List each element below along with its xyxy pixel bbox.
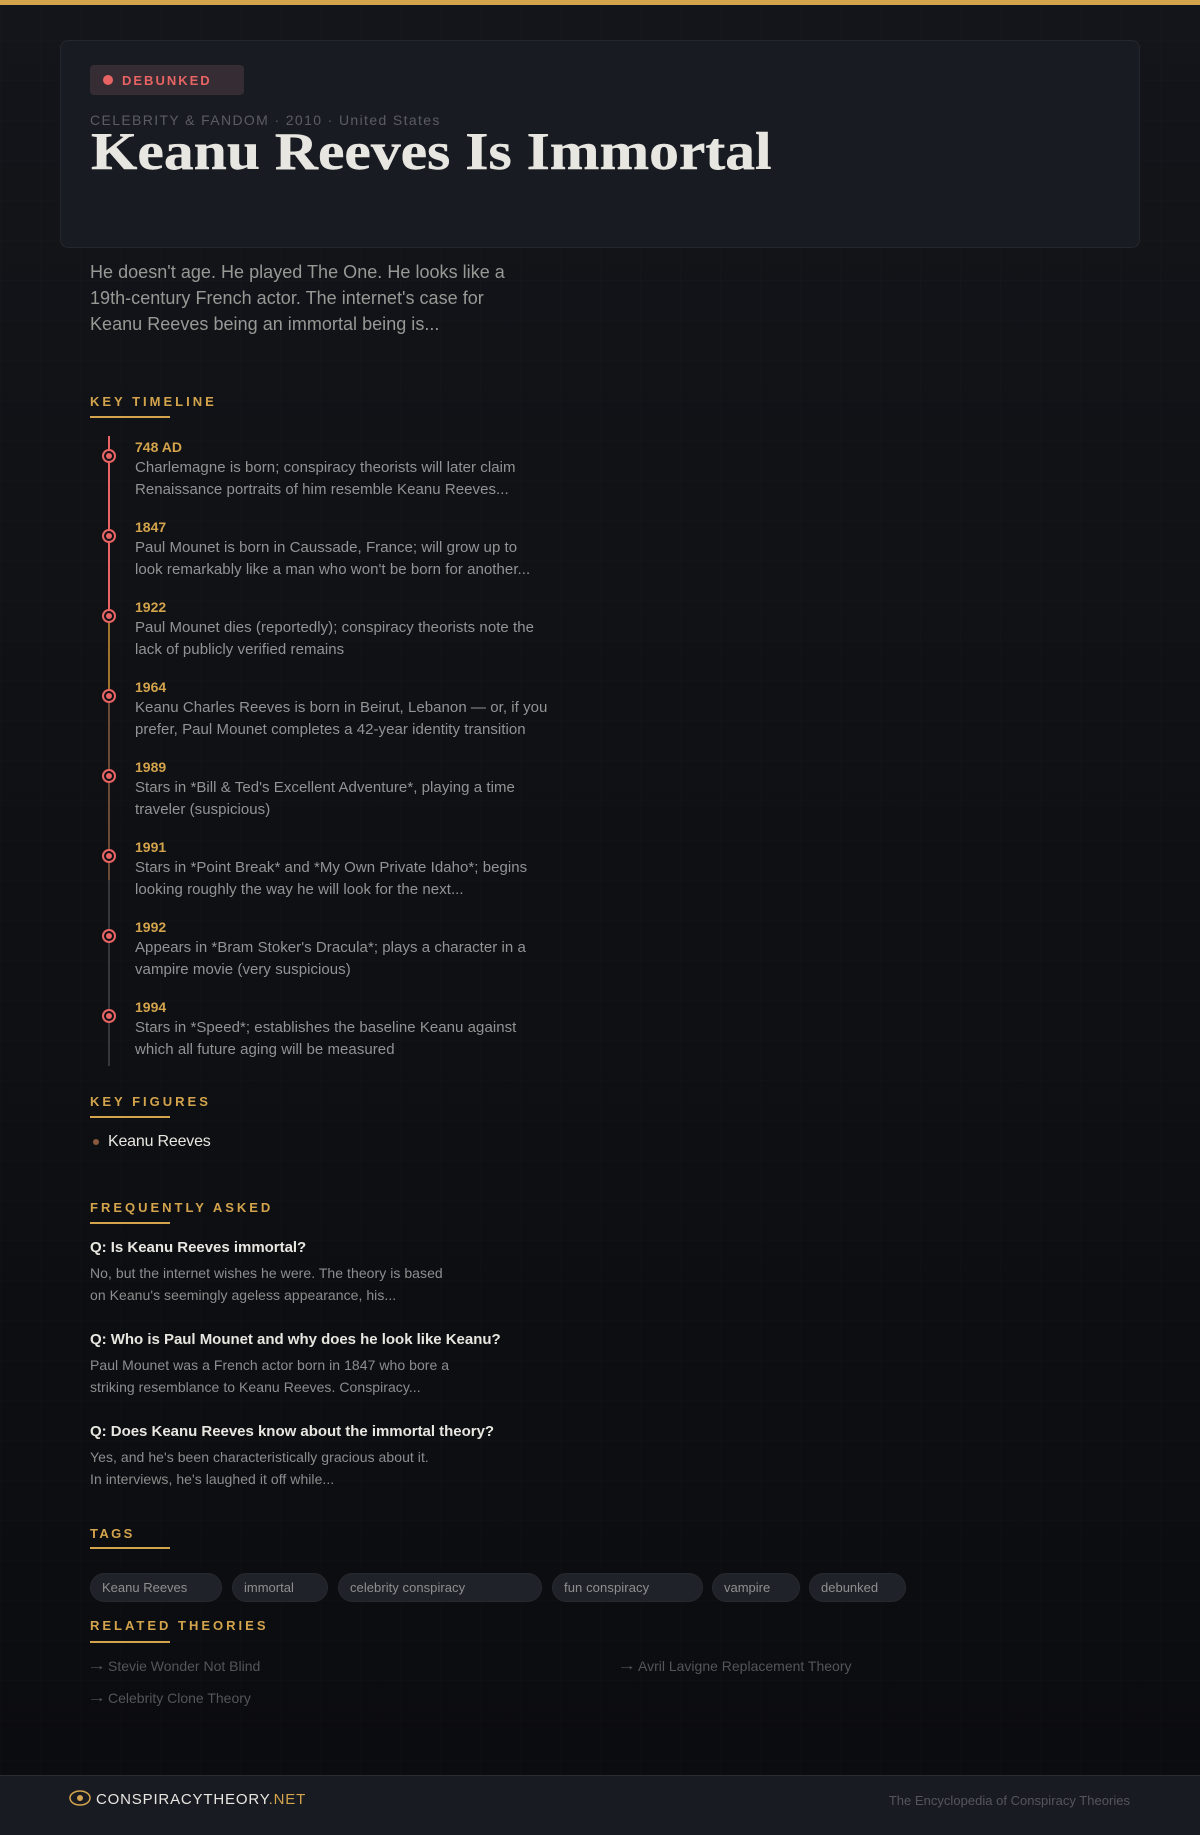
tag: Keanu Reeves bbox=[102, 1580, 187, 1595]
node bbox=[102, 849, 116, 863]
faq item 3: In interviews, he's laughed it off while... bbox=[90, 1471, 334, 1487]
node bbox=[102, 449, 116, 463]
node bbox=[102, 689, 116, 703]
intro text: He doesn't age. He played The One. He looks like a bbox=[90, 262, 505, 282]
badge label: DEBUNKED bbox=[122, 73, 212, 88]
intro text: 19th-century French actor. The internet's case for bbox=[90, 288, 484, 308]
timeline entry: 1994: which all future aging will be measured bbox=[135, 1041, 395, 1058]
timeline entry: 748 AD bbox=[102, 439, 516, 498]
faq item 3: Q: Does Keanu Reeves know about the immortal theory? bbox=[90, 1423, 494, 1440]
faq item 1: on Keanu's seemingly ageless appearance, his... bbox=[90, 1287, 396, 1303]
tag bbox=[90, 1573, 222, 1602]
timeline entry: 1991: looking roughly the way he will look for the next... bbox=[135, 881, 464, 898]
timeline entry: 1994: Stars in *Speed*; establishes the baseline Keanu against bbox=[135, 1019, 516, 1036]
intro text bbox=[90, 262, 505, 334]
status badge bbox=[90, 65, 244, 95]
badge dot bbox=[103, 75, 113, 85]
timeline entry: 1847: look remarkably like a man who won't be born for another... bbox=[135, 561, 530, 578]
tag bbox=[338, 1573, 542, 1602]
timeline entry: 1847 bbox=[102, 519, 530, 578]
tag bbox=[232, 1573, 328, 1602]
timeline line bbox=[108, 436, 110, 1066]
node bbox=[102, 1009, 116, 1023]
timeline entry: 748 AD: Renaissance portraits of him resemble Keanu Reeves... bbox=[135, 481, 509, 498]
faq item 3 bbox=[90, 1423, 494, 1487]
timeline entry: 1922 bbox=[102, 599, 534, 658]
faq item 1 bbox=[90, 1239, 443, 1303]
timeline entry: 1964: prefer, Paul Mounet completes a 42-year identity transition bbox=[135, 721, 526, 738]
footer bbox=[0, 1775, 1200, 1835]
timeline entry: 1991: 1991 bbox=[135, 839, 166, 855]
tag bbox=[809, 1573, 906, 1602]
brand: CONSPIRACYTHEORY.NET bbox=[96, 1791, 306, 1808]
tagline: The Encyclopedia of Conspiracy Theories bbox=[889, 1793, 1130, 1808]
related link: Celebrity Clone: → bbox=[87, 1689, 106, 1705]
related link: Avril Lavigne: Avril Lavigne Replacement Theory bbox=[638, 1658, 852, 1674]
tag bbox=[712, 1573, 800, 1602]
top accent bar bbox=[0, 0, 1200, 5]
heading: related theories: RELATED THEORIES bbox=[90, 1618, 268, 1633]
timeline entry: 1994 bbox=[102, 999, 516, 1058]
node bbox=[102, 769, 116, 783]
intro text: Keanu Reeves being an immortal being is... bbox=[90, 314, 439, 334]
timeline entry: 1964: Keanu Charles Reeves is born in Beirut, Lebanon — or, if you bbox=[135, 699, 547, 716]
tag: immortal bbox=[244, 1580, 294, 1595]
tag bbox=[552, 1573, 703, 1602]
related link: Stevie Wonder: Stevie Wonder Not Blind bbox=[108, 1658, 260, 1674]
tag pills bbox=[90, 1573, 906, 1602]
tag: celebrity conspiracy bbox=[350, 1580, 465, 1595]
timeline entry: 1989: 1989 bbox=[135, 759, 166, 775]
timeline entry: 1992: Appears in *Bram Stoker's Dracula*; plays a character in a bbox=[135, 939, 526, 956]
faq item 2: Paul Mounet was a French actor born in 1847 who bore a bbox=[90, 1357, 449, 1373]
figure: Keanu Reeves: Keanu Reeves bbox=[108, 1133, 211, 1150]
timeline entry: 1964 bbox=[102, 679, 547, 738]
heading: frequently asked: FREQUENTLY ASKED bbox=[90, 1200, 273, 1215]
timeline entry: 748 AD: Charlemagne is born; conspiracy theorists will later claim bbox=[135, 459, 516, 476]
tag: vampire bbox=[724, 1580, 770, 1595]
faq item 1: No, but the internet wishes he were. The theory is based bbox=[90, 1265, 443, 1281]
tag: debunked bbox=[821, 1580, 878, 1595]
timeline entry: 1992: 1992 bbox=[135, 919, 166, 935]
timeline entry: 1922: Paul Mounet dies (reportedly); conspiracy theorists note the bbox=[135, 619, 534, 636]
timeline entry: 1991 bbox=[102, 839, 527, 898]
faq item 2: striking resemblance to Keanu Reeves. Conspiracy... bbox=[90, 1379, 421, 1395]
timeline entry: 1847: 1847 bbox=[135, 519, 166, 535]
timeline entry: 1847: Paul Mounet is born in Caussade, France; will grow up to bbox=[135, 539, 517, 556]
timeline entry: 1922: lack of publicly verified remains bbox=[135, 641, 344, 658]
faq item 3: Yes, and he's been characteristically gracious about it. bbox=[90, 1449, 429, 1465]
panel: header card bbox=[60, 40, 1140, 248]
timeline entry: 748 AD: 748 AD bbox=[135, 439, 182, 455]
heading: key timeline: KEY TIMELINE bbox=[90, 394, 217, 409]
icon: eye bbox=[69, 1790, 91, 1806]
heading: key figures: KEY FIGURES bbox=[90, 1094, 211, 1109]
faq item 2: Q: Who is Paul Mounet and why does he look like Keanu? bbox=[90, 1331, 501, 1348]
timeline entry: 1989 bbox=[102, 759, 515, 818]
category line: CELEBRITY & FANDOM · 2010 · United States bbox=[90, 112, 441, 128]
timeline entry: 1994: 1994 bbox=[135, 999, 166, 1015]
faq item 1: Q: Is Keanu Reeves immortal? bbox=[90, 1239, 306, 1256]
node bbox=[102, 929, 116, 943]
heading: tags: TAGS bbox=[90, 1526, 135, 1541]
related link: Avril Lavigne: → bbox=[617, 1657, 636, 1673]
timeline entry: 1991: Stars in *Point Break* and *My Own Private Idaho*; begins bbox=[135, 859, 527, 876]
timeline entry: 1989: Stars in *Bill & Ted's Excellent Adventure*, playing a time bbox=[135, 779, 515, 796]
timeline entry: 1922: 1922 bbox=[135, 599, 166, 615]
tag: fun conspiracy bbox=[564, 1580, 649, 1595]
timeline entry: 1989: traveler (suspicious) bbox=[135, 801, 270, 818]
title: Keanu Reeves Is Immortal bbox=[91, 123, 772, 181]
related link: Celebrity Clone: Celebrity Clone Theory bbox=[108, 1690, 251, 1706]
node bbox=[102, 529, 116, 543]
faq item 2 bbox=[90, 1331, 501, 1395]
timeline entry: 1992: vampire movie (very suspicious) bbox=[135, 961, 351, 978]
related link: Stevie Wonder: → bbox=[87, 1657, 106, 1673]
bullet bbox=[93, 1139, 99, 1145]
node bbox=[102, 609, 116, 623]
timeline entry: 1992 bbox=[102, 919, 526, 978]
timeline entry: 1964: 1964 bbox=[135, 679, 166, 695]
